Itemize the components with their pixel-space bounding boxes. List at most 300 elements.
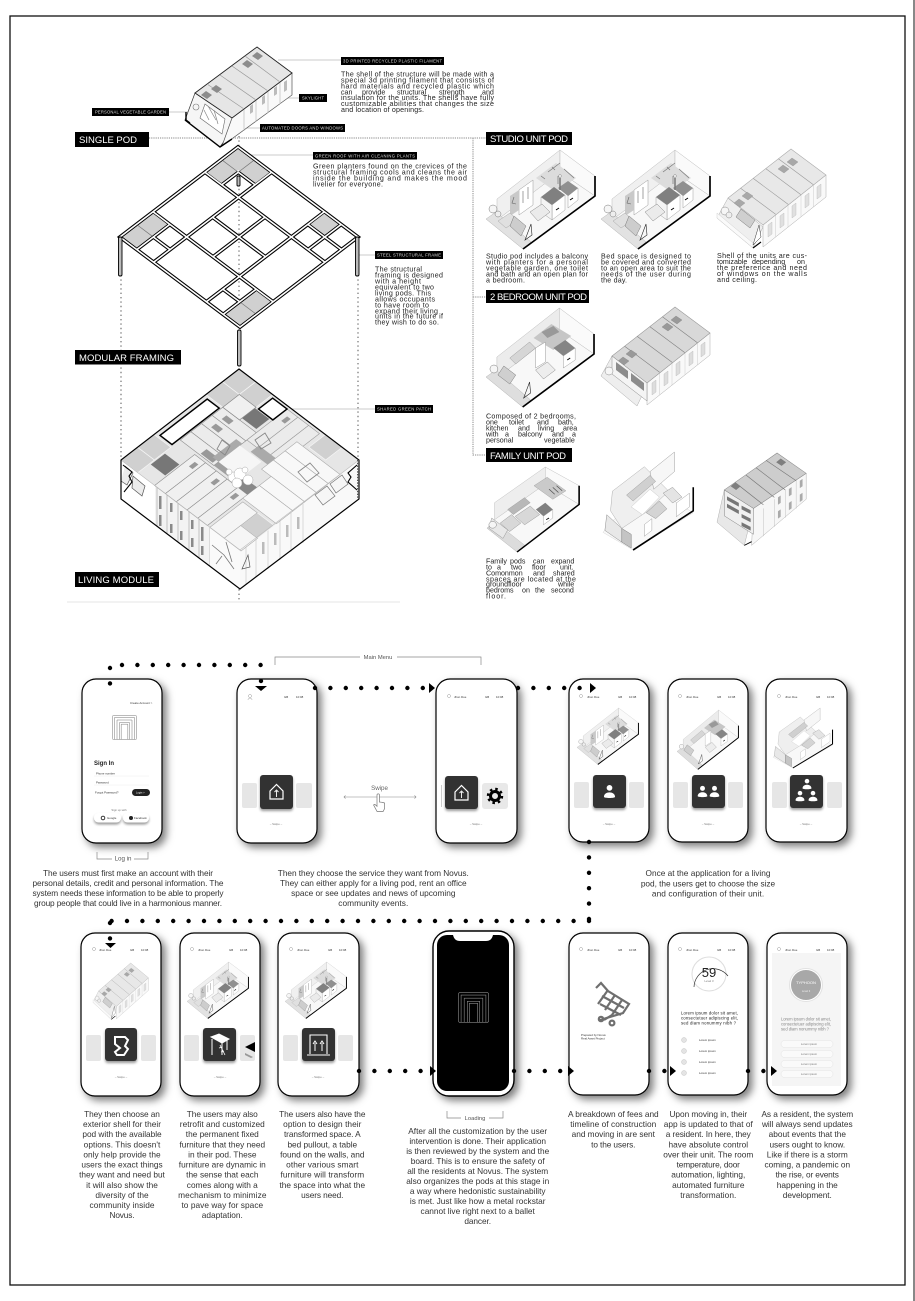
text: resident control description: Upon moving in, their [669,1109,747,1119]
tag: green roof [313,152,417,160]
text: resident control description: transformation. [680,1190,736,1200]
text: loading description [406,1126,550,1226]
text: family: and [533,570,545,578]
phone: size choice studio: 10:08 [629,695,637,699]
text: loading description: also organizes the pods at this stage in [406,1176,550,1186]
text: studio 3: depending [752,258,785,266]
text: green roof description: Green planters found on the crevices of the [313,162,467,170]
text: exterior shell description: only help provide the [83,1150,161,1160]
text: green roof description: livelier for everyone. [313,180,383,188]
text: structural frame description: framing is designed [375,272,443,280]
text: fixed furniture description: furniture are dynamic in [179,1160,266,1170]
phone: event updates: TYPHOON [796,980,816,985]
text: event updates description: about events that the [769,1129,846,1139]
phone: resident control: Jhon Doe [686,948,699,952]
text: family: spaces are located at the [486,576,576,584]
roof strips south-west [155,455,248,526]
text: family: Family [486,558,507,566]
text: family: on [522,586,530,594]
tag: steel structural frame: STEEL STRUCTURAL FRAME [377,253,441,258]
text: unit size description: Once at the application for a living [646,868,771,878]
text: fixed furniture description: furniture that they need [179,1140,266,1150]
text: shell description: special 3d printing filament that consists of [341,76,494,84]
text: service description: community events. [338,898,408,908]
text: smart furniture description: option to design their [283,1119,362,1129]
tag: automated doors and windows [260,124,345,132]
text: family: groundfloor [486,580,523,588]
text: structural frame description: The structural [375,266,422,274]
text: shell description: strength [439,88,465,96]
text: fixed furniture description: adaptation. [202,1210,243,1220]
tag: 3d printed filament: 3D PRINTED RECYCLED PLASTIC FILAMENT [343,59,442,64]
phone: sign in: Sign In [94,761,114,767]
text: unit size description: pod, the users get to choose the size [641,878,776,888]
text: smart furniture description: transformed space. A [284,1129,361,1139]
text: 2 bedroom: personal [486,436,514,444]
phone: sign in: Create Account > [130,701,153,705]
phone: fixed furniture: GB [229,948,233,952]
text: event updates description: will always send updates [761,1119,853,1129]
text: smart furniture description: The users also have the [279,1109,366,1119]
text: 2 bedroom: a [572,430,576,438]
family pod drawing 1 [487,467,579,552]
heading: single pod [75,132,149,147]
text: log in description: group people that could live in a harmonious manner. [34,898,222,908]
drawing: modular framing [118,147,359,366]
text: loading description: cannot live right next to a ballet [421,1206,536,1216]
phone: resident control: Lorem ipsum [699,1060,716,1064]
2 bedroom shell drawing [601,307,710,406]
text: shell description [341,70,494,114]
phone: fees and timeline [569,933,649,1095]
text: loading description: dancer. [464,1216,491,1226]
column overlap at right corner [357,460,359,499]
phone: event updates: Level 3 [802,989,811,993]
text: resident control description: temperature, door [677,1160,740,1170]
text: event updates description: Like if there is a storm [767,1150,848,1160]
tag: 3d printed filament [341,57,444,65]
text: structural frame description: allows occupants [375,296,435,304]
text: studio 1: Studio pod includes a balcony [486,252,588,260]
text: 2 bedroom: and [552,430,564,438]
phone: fees and timeline: 10:08 [629,948,637,952]
text: 2 bedroom: area [563,424,577,432]
text: studio 1: with planters for a personal [485,258,588,266]
studio pod drawing 1 [486,150,595,249]
phone: size choice studio: Jhon Doe [587,695,600,699]
phone: sign in: Password [96,780,109,784]
phone: smart furniture: Jhon Doe [297,948,310,952]
text: fees description: and moving in are sent [572,1129,656,1139]
phone: exterior shell [81,933,161,1096]
text: family: expand [551,558,574,566]
text: studio 3: on [797,258,805,266]
text: exterior shell description: pod with the available [82,1129,162,1139]
phone: resident control: Lorem ipsum [699,1071,716,1075]
text: shell description: insulation for the units. The shells have fully [341,94,494,102]
icon: cart [596,983,629,1025]
text: fixed furniture description: comes along with a [187,1180,258,1190]
text: studio 3: of windows on the walls [717,270,807,278]
text: family: two [511,564,522,572]
tag: shared green patch: SHARED GREEN PATCH [377,407,431,412]
text: loading description: a way where hedonistic sustainability [410,1186,546,1196]
phone: resident control [668,933,748,1095]
phone: sign in: Sign up with [111,808,127,812]
heading: studio unit pod: STUDIO UNIT POD [490,134,568,145]
text: unit size description: and configuration of their unit. [652,888,764,898]
text: log in description: personal details, credit and personal information. The [32,878,224,888]
text: exterior shell description: Novus. [110,1210,134,1220]
phone: main menu 1: 10:08 [296,695,304,699]
text: event updates description: the rise, or events [776,1170,839,1180]
phone: fixed furniture: Jhon Doe [198,948,211,952]
phone: size choice two bedroom: 10:08 [728,695,736,699]
phone: size choice studio [569,679,649,842]
text: fixed furniture description: mechanism to minimize [178,1190,267,1200]
phone: main menu 2: – Swipe – [470,822,483,826]
gauge: 59 [692,957,728,991]
columns [118,176,359,366]
central court [219,445,261,478]
text: structural frame description: expand their living [375,308,438,316]
text: smart furniture description: the space into what the [279,1180,366,1190]
text: shell description: hard materials and recycled plastic which [341,82,494,90]
text: 2 bedroom: a [505,430,509,438]
text: exterior shell description: diversity of the [95,1190,149,1200]
roof strips north-east [247,409,319,465]
text: studio 2: the day. [601,276,627,284]
text: family: second [551,586,574,594]
phone: event updates: Lorem ipsum [801,1062,818,1066]
drawing: living module [121,369,359,589]
text: fees description: to the users. [591,1140,635,1150]
drawing: single pod [185,47,292,147]
tag: skylight [299,94,327,102]
text: structural frame description: to have room to [375,302,429,310]
text: loading description: intervention is done. Their application [409,1136,546,1146]
phone: fixed furniture: – Swipe – [214,1075,227,1079]
structural beams [120,147,358,327]
tag: steel structural frame [375,251,443,259]
phone: main menu 2: GB [485,695,489,699]
text: studio 1 [485,252,589,284]
heading: family unit pod: FAMILY UNIT POD [490,451,566,462]
text: resident control description: have absolute control [668,1140,748,1150]
text: 2 bedroom: with [485,430,499,438]
heading: modular framing: MODULAR FRAMING [79,353,174,364]
text: smart furniture description [279,1109,366,1200]
phone: smart furniture: 10:08 [339,948,347,952]
text: green roof description: structural framing cools and cleans the air [313,168,468,176]
phone: event updates: GB [816,948,820,952]
phone: event updates: Lorem ipsum [801,1052,818,1056]
text: fees description [568,1109,659,1150]
phone: event updates: 10:08 [827,948,835,952]
roof plan [121,369,359,551]
text: studio 3: Shell of the units are cus- [717,252,808,260]
text: studio 2: needs of the user during [601,270,691,278]
text: service description [278,868,469,908]
text: loading description: is met. Just like how a metal rockstar [410,1196,546,1206]
bracket: log in [97,852,148,862]
swipe gesture: Swipe [371,785,388,792]
tag: personal vegetable garden: PERSONAL VEGETABLE GARDEN [95,110,166,115]
phone: event updates [767,933,847,1095]
callout leader lines [169,60,375,409]
text: loading description: After all the customization by the user [408,1126,547,1136]
phone: main menu 1: – Swipe – [270,822,283,826]
right wall [240,460,359,589]
text: 2 bedroom: one [486,418,498,426]
text: resident control description: a resident. In here, they [666,1129,752,1139]
phone: exterior shell: – Swipe – [115,1075,128,1079]
text: family: Comonmon [486,570,523,578]
text: fees description: timeline of construction [570,1119,657,1129]
text: green roof description [313,162,468,188]
flow arrowheads [105,683,777,1076]
heading: family unit pod [486,448,572,462]
text: event updates description: development. [783,1190,832,1200]
phone: sign in [82,679,162,843]
text: fixed furniture description: to pave way for space [181,1200,264,1210]
text: structural frame description: equivalent to two [375,284,434,292]
text: log in description [32,868,224,908]
balcony pods east [233,442,340,524]
roof strips north-west [180,407,256,465]
text: 2 bedroom: and [537,418,549,426]
text: event updates description [761,1109,853,1200]
phone: resident control: Lorem ipsum [699,1049,716,1053]
bottom corner roofs [210,502,274,551]
phone: main menu 1 [237,679,317,843]
text: loading description: all the residents at Novus. The system [407,1166,548,1176]
text: exterior shell description: options. This doesn't [84,1140,161,1150]
text: smart furniture description: bed pullout, a table [287,1140,358,1150]
bracket: main menu: Main Menu [364,655,392,661]
text: studio 1: vegetable garden, one toilet [486,264,588,272]
text: event updates description: happening in the [777,1180,838,1190]
text: service description: space or see updates and news of upcoming [291,888,456,898]
text: 2 bedroom: kitchen [486,424,509,432]
heading: single pod: SINGLE POD [79,135,137,146]
phone: size choice family [766,679,847,842]
tag: personal vegetable garden [92,108,169,116]
phone: main menu 1: GB [284,695,288,699]
text: smart furniture description: other various smart [286,1160,359,1170]
2 bedroom pod drawing [486,308,594,407]
text: studio 2: be covered and converted [601,258,691,266]
text: family: floor [532,564,546,572]
text: exterior shell description: community inside [90,1200,155,1210]
phone: fees and timeline: Prepared by Novus [581,1033,606,1037]
phone: smart furniture [278,933,359,1096]
text: smart furniture description: found on the walls, and [280,1150,365,1160]
phone: fees and timeline: Jhon Doe [587,948,600,952]
text: shell description: provide [362,88,385,96]
phone: size choice two bedroom: Jhon Doe [686,695,699,699]
family pod shell drawing [717,453,806,545]
text: studio 1: and bath and an open plan for [486,270,589,278]
dark patches [151,396,308,516]
text: 2 bedroom: living [538,424,554,432]
phone: smart furniture: – Swipe – [312,1075,325,1079]
text: studio 1: a bedroom. [486,276,525,284]
phone: size choice family: 10:08 [827,695,835,699]
bracket: main menu [275,655,481,665]
text: family: floor. [486,592,506,600]
text: family: to [486,564,492,572]
phone: sign in: Phone number [96,772,115,776]
text: studio 3 [717,252,808,284]
phone: main menu 2: 10:08 [496,695,504,699]
text: exterior shell description: exterior shell for their [83,1119,161,1129]
text: exterior shell description: it will also show the [86,1180,158,1190]
bracket: log in: Log in [115,856,132,862]
phone: resident control: 10:08 [728,948,736,952]
text: shell description: The shell of the structure will be made with a [341,70,494,78]
text: family: a [497,564,501,572]
text: structural frame description: living pods. This [375,290,431,298]
text: fixed furniture description [178,1109,267,1220]
tag: green roof: GREEN ROOF WITH AIR CLEANING PLANTS [315,154,415,158]
text: resident control description: automation, lighting, [671,1170,745,1180]
heading: living module [75,572,159,587]
phone: size choice family: GB [816,695,820,699]
phone: event updates: Lorem ipsum dolor sit amet, [781,1016,831,1022]
text: fixed furniture description: in their pod. These [188,1150,257,1160]
text: structural frame description: with a height [374,278,421,286]
phone: smart furniture: GB [328,948,332,952]
text: 2 bedroom: toilet [509,418,524,426]
phone: sign in: Login > [136,790,145,794]
phone: size choice two bedroom: – Swipe – [702,822,715,826]
text: family: the [535,586,545,594]
phone: sign in: Google [107,816,117,820]
text: resident control description: app is updated to that of [664,1119,753,1129]
text: studio 3: the preference and need [717,264,807,272]
tag: shared green patch [375,405,433,413]
heading: 2 bedroom unit pod: 2 BEDROOM UNIT POD [490,292,587,303]
text: family: shared [553,570,575,578]
text: shell description: customizable abilities that changes the size [341,100,494,108]
phone: loading [433,931,514,1096]
text: green roof description: inside the building and makes the mood [313,174,467,182]
text: shell description: can [341,88,352,96]
tag: automated doors and windows: AUTOMATED DOORS AND WINDOWS [262,126,343,131]
text: shell description: structural [397,88,427,96]
text: family [486,558,576,600]
dashed leader system [121,114,486,600]
phone: fixed furniture: 10:08 [240,948,248,952]
text: fixed furniture description: retrofit and customized [180,1119,265,1129]
text: fixed furniture description: the sense that each [186,1170,259,1180]
text: structural frame description [374,266,443,326]
text: family: can [533,558,544,566]
text: studio 2: Bed space is designed to [601,252,691,260]
text: family: unit. [560,564,573,572]
text: resident control description: automated furniture [672,1180,745,1190]
gauge: 59: 59 [702,965,716,980]
tag: skylight: SKYLIGHT [302,96,324,101]
phone: resident control: sed diam nonummy nibh ? [681,1020,737,1026]
text: 2 bedroom: vegetable [544,436,575,444]
phone: sign in: Facebook [134,816,147,820]
phone: main menu 2: Jhon Doe [454,695,467,699]
bracket: loading [447,1111,503,1122]
phone: fees and timeline: GB [618,948,622,952]
skylights [174,393,315,500]
text: family: while [557,580,574,588]
phone: size choice two bedroom [668,679,748,842]
text: structural frame description: they wish to do so. [375,318,439,326]
phone: resident control: Lorem ipsum [699,1038,716,1042]
phone: resident control: Lorem ipsum dolor sit amet, [681,1010,738,1016]
swipe gesture [344,785,416,812]
text: 2 bedroom: Composed of 2 bedrooms, [486,412,576,420]
text: exterior shell description: They then choose an [84,1109,160,1119]
phone: resident control: GB [717,948,721,952]
text: unit size description [641,868,776,898]
green roof patches [123,149,356,325]
phone: sign in: Forgot Password? [95,790,119,794]
text: shell description: and [482,88,494,96]
phone: size choice family: – Swipe – [800,822,813,826]
phone: exterior shell: 10:08 [141,948,149,952]
phone: fixed furniture [180,933,260,1096]
heading: modular framing [75,350,181,364]
phone: main menu 2 [436,679,517,843]
central tree [226,467,253,488]
text: exterior shell description: users the exact things [81,1160,163,1170]
text: structural frame description: units in the future if [375,312,443,320]
text: studio 2 [601,252,691,284]
phone: size choice two bedroom: GB [717,695,721,699]
text: family: bedroms [486,586,514,594]
studio pod drawing 2 [601,150,710,249]
text: log in description: The users must first make an account with their [43,868,213,878]
text: fixed furniture description: the permanent fixed [186,1129,259,1139]
text: fixed furniture description: The users may also [187,1109,258,1119]
text: loading description: is then reviewed by the system and the [406,1146,550,1156]
text: 2 bedroom: balcony [518,430,543,438]
corner patches [121,369,359,551]
outline [121,369,359,589]
text: exterior shell description [79,1109,166,1220]
studio pod shell drawing [717,149,826,248]
phone: size choice studio: – Swipe – [603,822,616,826]
bracket: loading: Loading [465,1116,485,1122]
phone: size choice family: Jhon Doe [785,695,798,699]
phone: event updates: Lorem ipsum [801,1072,818,1076]
text: service description: Then they choose the service they want from Novus. [278,868,469,878]
text: resident control description: over their unit. The room [663,1150,753,1160]
phone: event updates: Lorem ipsum [801,1042,818,1046]
left wall [121,460,240,589]
text: event updates description: users ought to know. [769,1140,845,1150]
family pod drawing 2 [603,452,693,550]
text: service description: They can either apply for a living pod, rent an office [280,878,467,888]
text: exterior shell description: they want and need but [79,1170,166,1180]
phone: event updates: sed diam nonummy nibh ? [781,1026,830,1032]
text: shell description: and location of openings. [341,106,424,114]
phone: size choice studio: GB [618,695,622,699]
text: studio 2: to an open area to suit the [601,264,691,272]
phone: event updates: Jhon Doe [785,948,798,952]
dotted flow connectors [110,665,765,1071]
openings [160,374,287,471]
text: log in description: system needs these information to be able to properly [32,888,224,898]
